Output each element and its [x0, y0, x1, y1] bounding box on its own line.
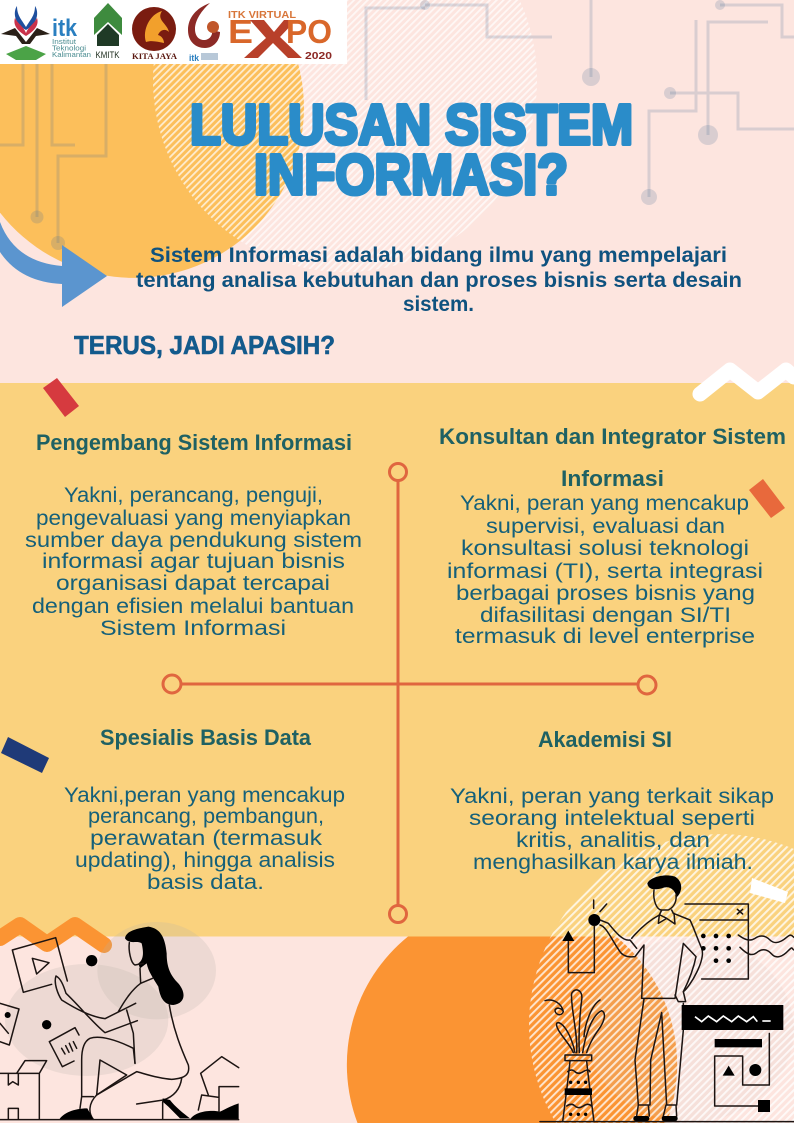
circuit lines right	[366, 0, 794, 205]
panel: Spesialis Basis Data	[64, 725, 345, 894]
circuit lines left	[0, 64, 106, 250]
panel: Pengembang Sistem Informasi: Sistem Informasi	[100, 617, 286, 640]
panel: Akademisi SI: seorang intelektual seperti	[469, 807, 755, 830]
intro text: Sistem Informasi adalah bidang ilmu yang mempelajari	[150, 244, 727, 267]
panel: Pengembang Sistem Informasi: organisasi dapat tercapai	[56, 572, 330, 595]
logo: Kita Jaya	[132, 7, 177, 61]
logo: ITK Virtual Expo 2020	[228, 9, 332, 62]
panel: Pengembang Sistem Informasi	[25, 430, 362, 640]
accent: orange zigzag	[0, 925, 104, 945]
intro text	[136, 244, 742, 316]
panel: Konsultan dan Integrator: Informasi	[561, 466, 664, 491]
title: INFORMASI?	[254, 143, 568, 207]
logo bar	[0, 0, 347, 64]
panel: Akademisi SI: Yakni, peran yang terkait sikap	[450, 785, 774, 808]
panel: Konsultan dan Integrator: difasilitasi dengan SI/TI	[480, 604, 731, 627]
logo: gear: itk	[189, 53, 200, 63]
panel: Akademisi SI: menghasilkan karya ilmiah.	[473, 851, 753, 874]
logo: ITK: Institut	[52, 37, 77, 46]
logo: KMITK	[94, 3, 122, 60]
panel: Pengembang Sistem Informasi: informasi agar tujuan bisnis	[42, 550, 345, 573]
illustration: woman with cards and boxes	[0, 922, 239, 1120]
logo: ITK: Kalimantan	[52, 50, 91, 59]
panel: Akademisi SI	[450, 727, 774, 874]
panel: Pengembang Sistem Informasi: pengevaluasi yang menyiapkan	[36, 507, 351, 530]
panel: Pengembang Sistem Informasi: sumber daya pendukung sistem	[25, 529, 362, 552]
panel: Konsultan dan Integrator: konsultasi solusi teknologi	[461, 537, 749, 560]
accent: white zigzag	[700, 370, 794, 394]
panel: Akademisi SI: kritis, analitis, dan	[516, 829, 710, 852]
logo: ITK Virtual Expo 2020: 2020	[305, 50, 332, 62]
panel: Spesialis Basis Data: Yakni,peran yang mencakup	[64, 784, 345, 807]
arrow: blue curved	[0, 222, 107, 307]
logo: KMITK: KMITK	[96, 50, 120, 60]
panel: Spesialis Basis Data: basis data.	[147, 871, 264, 894]
subheading: TERUS, JADI APASIH?	[74, 330, 335, 360]
cross timeline	[163, 464, 656, 922]
logo: gear	[188, 3, 220, 63]
logo: ITK Virtual Expo 2020: ITK VIRTUAL	[228, 9, 297, 21]
logo: Kita Jaya: KITA JAYA	[132, 52, 177, 61]
logo: ITK Virtual Expo 2020: PO	[286, 13, 332, 50]
title	[190, 93, 633, 207]
panel: Spesialis Basis Data: perancang, pembangun,	[88, 805, 324, 828]
panel: Pengembang Sistem Informasi: dengan efisien melalui bantuan	[32, 595, 354, 618]
decorative yellow circle with hatching	[0, 0, 537, 278]
panel: yellow band	[0, 383, 794, 936]
logo: ITK: Teknologi	[52, 44, 86, 52]
panel: Akademisi SI: Akademisi SI	[538, 727, 672, 752]
panel: Spesialis Basis Data: Spesialis Basis Data	[100, 725, 312, 750]
panel: Konsultan dan Integrator: Yakni, peran yang mencakup	[460, 492, 749, 515]
accent: red tag	[43, 378, 79, 417]
title: LULUSAN SISTEM	[190, 93, 633, 157]
logo: ITK	[1, 6, 91, 60]
intro text: tentang analisa kebutuhan dan proses bisnis serta desain	[136, 269, 742, 292]
logo: ITK: itk	[52, 15, 78, 42]
orange circle bottom	[347, 936, 677, 1123]
accent: white note	[750, 878, 788, 903]
logo: ITK Virtual Expo 2020: E	[228, 13, 253, 50]
panel: Pengembang Sistem Informasi: Pengembang Sistem Informasi	[36, 430, 352, 455]
panel: Konsultan dan Integrator: Konsultan dan Integrator Sistem	[439, 424, 786, 449]
panel: Pengembang Sistem Informasi: Yakni, perancang, penguji,	[64, 484, 323, 507]
hatched circle bottom right	[529, 834, 794, 1123]
panel: Konsultan dan Integrator: supervisi, evaluasi dan	[486, 515, 725, 538]
panel: Konsultan dan Integrator: termasuk di level enterprise	[455, 625, 755, 648]
accent: orange tag	[749, 479, 785, 518]
illustration: man with interface and plant	[540, 875, 794, 1122]
panel: Konsultan dan Integrator: berbagai proses bisnis yang	[456, 582, 755, 605]
panel: Spesialis Basis Data: perawatan (termasuk	[90, 827, 323, 850]
panel: Konsultan dan Integrator: informasi (TI), serta integrasi	[447, 560, 763, 583]
intro text: sistem.	[403, 293, 474, 316]
panel: Konsultan dan Integrator	[439, 424, 786, 648]
accent: navy tag	[1, 737, 49, 773]
panel: Spesialis Basis Data: updating), hingga analisis	[75, 849, 335, 872]
